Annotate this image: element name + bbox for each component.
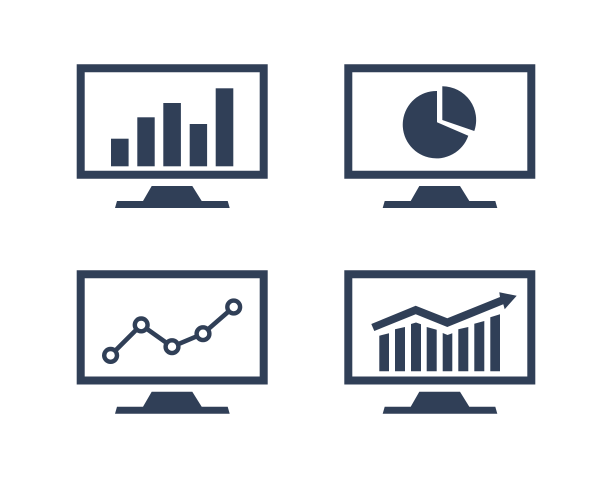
rising arrow xyxy=(371,292,517,331)
monitor frame xyxy=(77,270,268,384)
monitor stand xyxy=(383,186,497,208)
monitor stand xyxy=(115,392,230,414)
line chart xyxy=(104,301,240,362)
icon: monitor with bar chart xyxy=(77,64,268,208)
monitor stand xyxy=(115,186,230,208)
icon: monitor with bars and rising arrow xyxy=(344,270,535,414)
monitor frame xyxy=(344,270,535,384)
icon: monitor with pie chart xyxy=(344,64,535,208)
monitor frame xyxy=(77,64,268,179)
bar chart xyxy=(111,88,233,166)
monitor frame xyxy=(344,64,535,179)
bars xyxy=(379,314,500,371)
monitor stand xyxy=(383,392,497,414)
icon: monitor with line chart xyxy=(77,270,268,414)
pie chart xyxy=(403,86,476,158)
